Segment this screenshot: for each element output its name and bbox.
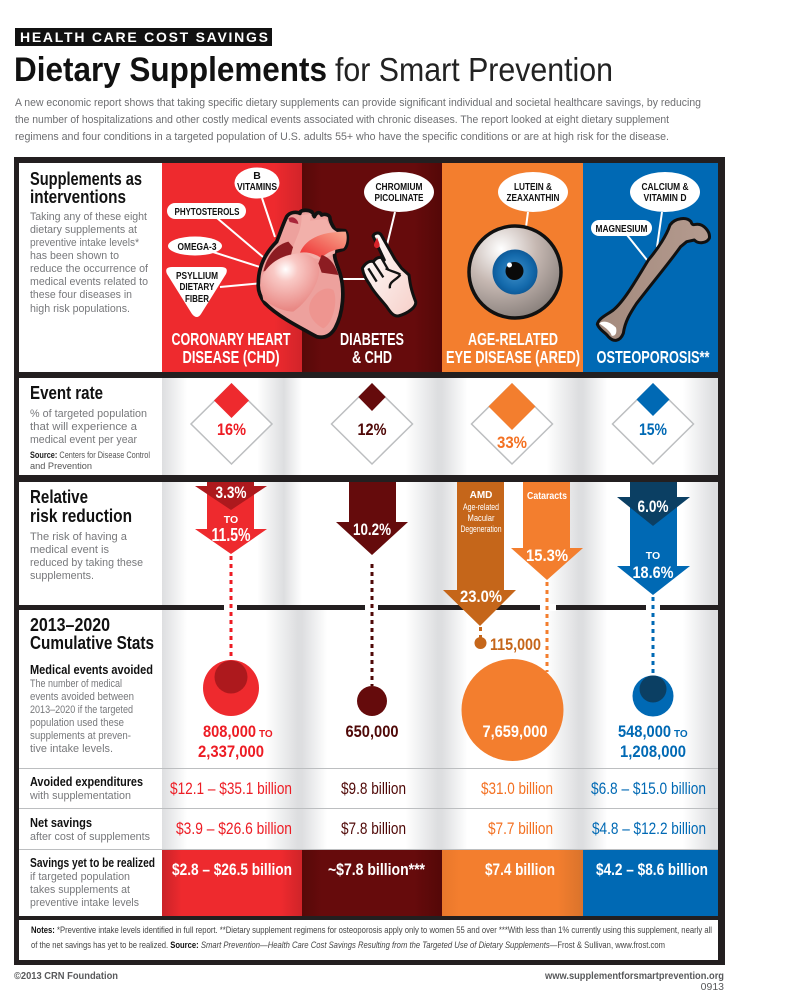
arrow: osteoporosis range: 6.0% [638, 497, 668, 516]
text: risk description: reduced by taking these [30, 557, 143, 569]
text: event rate source: and Prevention [30, 461, 92, 471]
text: medical events avoided [30, 662, 153, 755]
row: net savings: $3.9 – $26.6 billion [176, 819, 292, 838]
bubble: osteoporosis events avoided: 548,000 [618, 722, 671, 741]
bubble: cataracts events avoided [462, 659, 564, 761]
arrow: diabetes: 10.2% [353, 520, 391, 539]
callout: chromium picolinate: PICOLINATE [374, 192, 424, 204]
callout: calcium and vitamin D: VITAMIN D [644, 192, 687, 204]
heading: supplements as interventions: interventions [30, 186, 126, 207]
row: savings yet to be realized: takes supplements at [30, 884, 130, 896]
text: event rate description: that will experience a [30, 421, 138, 433]
arrow: AMD [443, 482, 516, 626]
row: net savings: $7.8 billion [341, 819, 406, 838]
text: supplements description: high risk populations. [30, 303, 130, 315]
callout: omega-3: OMEGA-3 [178, 241, 217, 253]
row: avoided expenditures: Avoided expenditures [30, 774, 143, 789]
arrow: cataracts: 15.3% [526, 546, 568, 565]
text: supplements description: medical events related to [30, 276, 148, 288]
intro text: A new economic report shows that taking specific dietary supplements can provide significant individual and societal healthcare savings, by reducing [15, 97, 701, 109]
bubble: osteoporosis events avoided: TO [674, 729, 688, 740]
row: avoided expenditures: $12.1 – $35.1 billion [170, 779, 292, 798]
title [14, 51, 613, 89]
row: savings yet to be realized: preventive intake levels [30, 897, 139, 909]
text: medical events avoided: The number of medical [30, 678, 122, 690]
section tag: HEALTH CARE COST SAVINGS [20, 29, 268, 45]
intro text [15, 97, 701, 143]
disease labels: & CHD [352, 347, 392, 367]
row: savings yet to be realized: ~$7.8 billion*** [328, 860, 425, 879]
notes: of the net savings has yet to be realized. Source: Smart Prevention—Health Care Cost Savings Resulting from the Targeted Use of Dietary Supplements—Frost & Sullivan, www.frost.com [31, 940, 665, 951]
callout: calcium and vitamin D [630, 172, 700, 212]
title: Dietary Supplements [14, 51, 327, 89]
arrow: AMD: 23.0% [460, 587, 502, 606]
main frame [14, 157, 725, 965]
heading: relative risk reduction [30, 486, 132, 526]
row: avoided expenditures: with supplementation [29, 790, 131, 802]
row: net savings: Net savings [30, 815, 92, 830]
event rate diamond: eye disease [472, 383, 552, 464]
row dividers [19, 768, 718, 850]
icon: bone [597, 219, 709, 340]
text: supplements description: preventive intake levels* [30, 237, 140, 249]
text: event rate source [30, 450, 150, 471]
disease labels: DIABETES [340, 329, 404, 349]
disease labels: OSTEOPOROSIS** [596, 347, 710, 367]
title: for Smart Prevention [335, 51, 613, 88]
icon: eye [469, 226, 561, 318]
text: supplements description: Taking any of these eight [30, 211, 147, 223]
disease labels: EYE DISEASE (ARED) [446, 347, 580, 367]
text: event rate source: Source: Centers for Disease Control [30, 450, 150, 460]
heading: relative risk reduction: Relative [30, 486, 88, 507]
event rate diamond: CHD [191, 383, 272, 464]
row: savings yet to be realized: $7.4 billion [485, 860, 555, 879]
dotted connectors [231, 556, 653, 686]
arrow: AMD: Age-related [463, 502, 499, 513]
row: avoided expenditures [29, 774, 706, 802]
bubble: osteoporosis events avoided: 1,208,000 [620, 742, 686, 761]
callout: chromium picolinate: CHROMIUM [376, 181, 423, 193]
footer: website [544, 970, 724, 993]
arrow: AMD: Degeneration [460, 524, 502, 535]
arrow: AMD: Macular [468, 513, 494, 524]
text: supplements description: reduce the occurrence of [30, 263, 149, 275]
bubble: AMD events avoided [474, 635, 541, 654]
callout: phytosterols [167, 203, 246, 219]
arrow: CHD range: 3.3% [216, 483, 246, 502]
callout: lutein and zeaxanthin: ZEAXANTHIN [506, 192, 560, 204]
callout: omega-3 [168, 236, 222, 256]
intro text: the number of hospitalizations and other costly medical events associated with chronic diseases. The report looked at eight dietary supplement [15, 114, 669, 126]
icon: heart [258, 210, 347, 337]
heading: relative risk reduction: risk reduction [30, 505, 132, 526]
row: savings yet to be realized: Savings yet to be realized [30, 855, 155, 870]
row: savings yet to be realized: $2.8 – $26.5 billion [172, 860, 292, 879]
event rate diamond: eye disease: 33% [497, 433, 527, 452]
text: supplements description: these four diseases in [30, 289, 132, 301]
callout: magnesium [591, 220, 652, 236]
arrow: diabetes [336, 482, 408, 555]
text: medical events avoided: Medical events avoided [30, 662, 153, 677]
bubble: CHD events avoided: 808,000 [203, 722, 256, 741]
callout: lutein and zeaxanthin: LUTEIN & [514, 181, 552, 193]
bubble: diabetes events avoided: 650,000 [346, 722, 398, 741]
heading: supplements as interventions: Supplements as [30, 168, 142, 189]
bubble: CHD events avoided [198, 660, 273, 761]
callout: B vitamins: B [253, 170, 261, 182]
callout: phytosterols: PHYTOSTEROLS [174, 206, 240, 218]
callout: psyllium: FIBER [185, 293, 209, 305]
connector lines [213, 198, 662, 287]
event rate diamond: osteoporosis [612, 383, 694, 464]
divider band [14, 605, 725, 610]
arrow: CHD range [195, 482, 267, 554]
footer: website: 0913 [701, 981, 724, 993]
text: supplements description [30, 211, 149, 315]
callout: psyllium: PSYLLIUM [176, 270, 218, 282]
bubble: CHD events avoided: TO [259, 729, 273, 740]
arrow: osteoporosis range: TO [646, 550, 660, 562]
text: risk description: medical event is [30, 544, 109, 556]
row: net savings [30, 815, 706, 843]
arrow: cataracts [511, 482, 583, 580]
arrow: CHD range: TO [224, 514, 238, 526]
disease labels: CORONARY HEART [172, 329, 291, 349]
bubble: cataracts events avoided: 7,659,000 [482, 722, 548, 741]
footer: copyright: ©2013 CRN Foundation [14, 970, 118, 982]
text: medical events avoided: supplements at preven- [30, 730, 131, 742]
text: medical events avoided: events avoided between [30, 691, 134, 703]
callout: chromium picolinate [364, 172, 434, 212]
disease labels [172, 329, 710, 367]
event rate diamond: osteoporosis: 15% [639, 420, 667, 439]
intro text: regimens and four conditions in a targeted population of U.S. adults 55+ who have the specific conditions or are at high risk for the disease. [15, 131, 669, 143]
callout: magnesium: MAGNESIUM [596, 223, 648, 235]
callout: B vitamins: VITAMINS [237, 181, 277, 193]
text: risk description [30, 531, 143, 582]
event rate diamond: diabetes: 12% [358, 420, 386, 439]
bubble: osteoporosis events avoided [618, 676, 688, 761]
heading: cumulative stats [30, 614, 154, 653]
text: event rate description: medical event per year [30, 434, 137, 446]
row: net savings: $7.7 billion [488, 819, 553, 838]
footer: website: www.supplementforsmartprevention.org [544, 970, 724, 982]
row: net savings: $4.8 – $12.2 billion [592, 819, 706, 838]
event rate diamond: diabetes [332, 383, 412, 464]
arrow: osteoporosis range: 18.6% [632, 563, 674, 582]
arrow: osteoporosis range [617, 482, 690, 595]
icon: finger and blood drop [362, 233, 416, 316]
row: avoided expenditures: $31.0 billion [481, 779, 553, 798]
text: supplements description: dietary supplements at [30, 224, 137, 236]
event rate diamond: CHD: 16% [217, 420, 246, 439]
callout: lutein and zeaxanthin [498, 172, 568, 212]
text: risk description: supplements. [30, 570, 94, 582]
heading: cumulative stats: Cumulative Stats [30, 632, 154, 653]
row: savings yet to be realized: $4.2 – $8.6 billion [596, 860, 708, 879]
column shading [162, 378, 718, 850]
disease labels: DISEASE (CHD) [182, 347, 280, 367]
heading: cumulative stats: 2013–2020 [30, 614, 110, 635]
arrow: cataracts: Cataracts [527, 490, 567, 502]
heading: event rate: Event rate [30, 382, 103, 403]
callout: B vitamins [234, 168, 280, 198]
arrow: AMD: AMD [470, 490, 492, 501]
bubble: CHD events avoided: 2,337,000 [198, 742, 264, 761]
row: savings yet to be realized: if targeted population [30, 871, 130, 883]
text: supplements description: has been shown to [30, 250, 119, 262]
text: event rate description: % of targeted population [30, 408, 147, 420]
callout: psyllium [166, 267, 227, 317]
panel: disease columns [162, 163, 718, 372]
bubble: diabetes events avoided [346, 686, 398, 741]
arrow: CHD range: 11.5% [212, 525, 250, 545]
heading: supplements as interventions [30, 168, 142, 207]
row: savings yet to be realized [30, 850, 718, 916]
text: medical events avoided: tive intake levels. [30, 743, 113, 755]
text: risk description: The risk of having a [30, 531, 128, 543]
row: avoided expenditures: $6.8 – $15.0 billion [591, 779, 706, 798]
callout: calcium and vitamin D: CALCIUM & [642, 181, 689, 193]
disease labels: AGE-RELATED [468, 329, 558, 349]
row: avoided expenditures: $9.8 billion [341, 779, 406, 798]
text: event rate description [30, 408, 147, 446]
callout: psyllium: DIETARY [180, 281, 214, 293]
text: medical events avoided: 2013–2020 if the targeted [30, 704, 133, 716]
band gaps [224, 604, 660, 611]
bubble: AMD events avoided: 115,000 [490, 635, 541, 654]
row: net savings: after cost of supplements [30, 831, 150, 843]
notes [31, 925, 712, 951]
text: medical events avoided: population used these [30, 717, 124, 729]
